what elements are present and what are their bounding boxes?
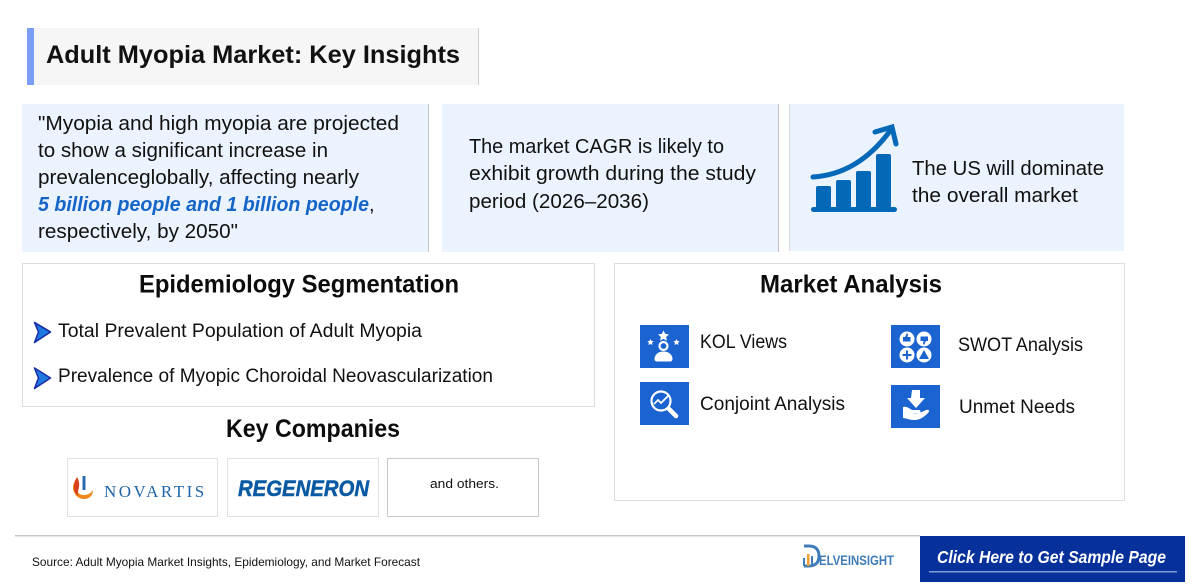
button: get sample page xyxy=(920,536,1185,582)
panel: epidemiology segmentation xyxy=(22,264,594,406)
panel: market CAGR: The market CAGR is likely to xyxy=(469,136,724,158)
panel: market analysis xyxy=(614,264,1124,500)
text: total prevalent population: Total Prevalent Population of Adult Myopia xyxy=(58,321,422,342)
logo: regeneron: REGENERON xyxy=(238,476,370,501)
text: SWOT analysis: SWOT Analysis xyxy=(958,335,1083,356)
panel: prevalence quote: "Myopia and high myopia are projected xyxy=(38,113,399,135)
logo: novartis xyxy=(68,458,218,516)
text: choroidal neovascularization: Prevalence of Myopic Choroidal Neovascularization xyxy=(58,366,493,387)
heading: market analysis: Market Analysis xyxy=(760,270,942,298)
icon: KOL views xyxy=(640,325,689,368)
logo: regeneron xyxy=(228,458,378,516)
box: and others xyxy=(388,458,538,516)
footer rule xyxy=(15,535,920,536)
panel: prevalence quote: respectively, by 2050" xyxy=(38,221,238,243)
text: conjoint analysis: Conjoint Analysis xyxy=(700,394,845,415)
panel: prevalence quote xyxy=(22,104,429,252)
icon: unmet needs xyxy=(891,385,940,428)
logo: novartis: NOVARTIS xyxy=(104,482,207,501)
text: unmet needs: Unmet Needs xyxy=(959,397,1075,418)
panel: prevalence quote: to show a significant increase in xyxy=(38,140,328,162)
panel: prevalence quote: 5 billion people and 1 billion people xyxy=(38,194,369,216)
panel: prevalence quote: , xyxy=(369,194,375,216)
title: Adult Myopia Market: Key Insights xyxy=(46,41,460,69)
panel: market CAGR: period (2026–2036) xyxy=(469,191,649,213)
icon: SWOT analysis xyxy=(891,325,940,368)
heading: epidemiology segmentation: Epidemiology Segmentation xyxy=(139,270,459,298)
logo: delveinsight: ELVEINSIGHT xyxy=(819,553,895,568)
icon: conjoint analysis xyxy=(640,382,689,425)
logo: delveinsight xyxy=(803,546,895,568)
icon: growth chart xyxy=(811,127,897,212)
panel: market CAGR xyxy=(442,104,779,252)
heading: key companies: Key Companies xyxy=(226,415,400,443)
title xyxy=(27,28,479,85)
panel: US dominance xyxy=(789,104,1124,251)
panel: US dominance: The US will dominate xyxy=(912,158,1104,180)
button: get sample page: Click Here to Get Sample Page xyxy=(937,547,1166,567)
source note: Source: Adult Myopia Market Insights, Epidemiology, and Market Forecast xyxy=(32,555,421,569)
panel: prevalence quote: prevalenceglobally, affecting nearly xyxy=(38,167,359,189)
text: KOL views: KOL Views xyxy=(700,332,787,353)
box: and others: and others. xyxy=(430,476,499,491)
panel: US dominance: the overall market xyxy=(912,185,1078,207)
icon: arrow bullet one xyxy=(34,322,50,342)
panel: market CAGR: exhibit growth during the study xyxy=(469,163,756,185)
icon: arrow bullet two xyxy=(34,368,50,388)
